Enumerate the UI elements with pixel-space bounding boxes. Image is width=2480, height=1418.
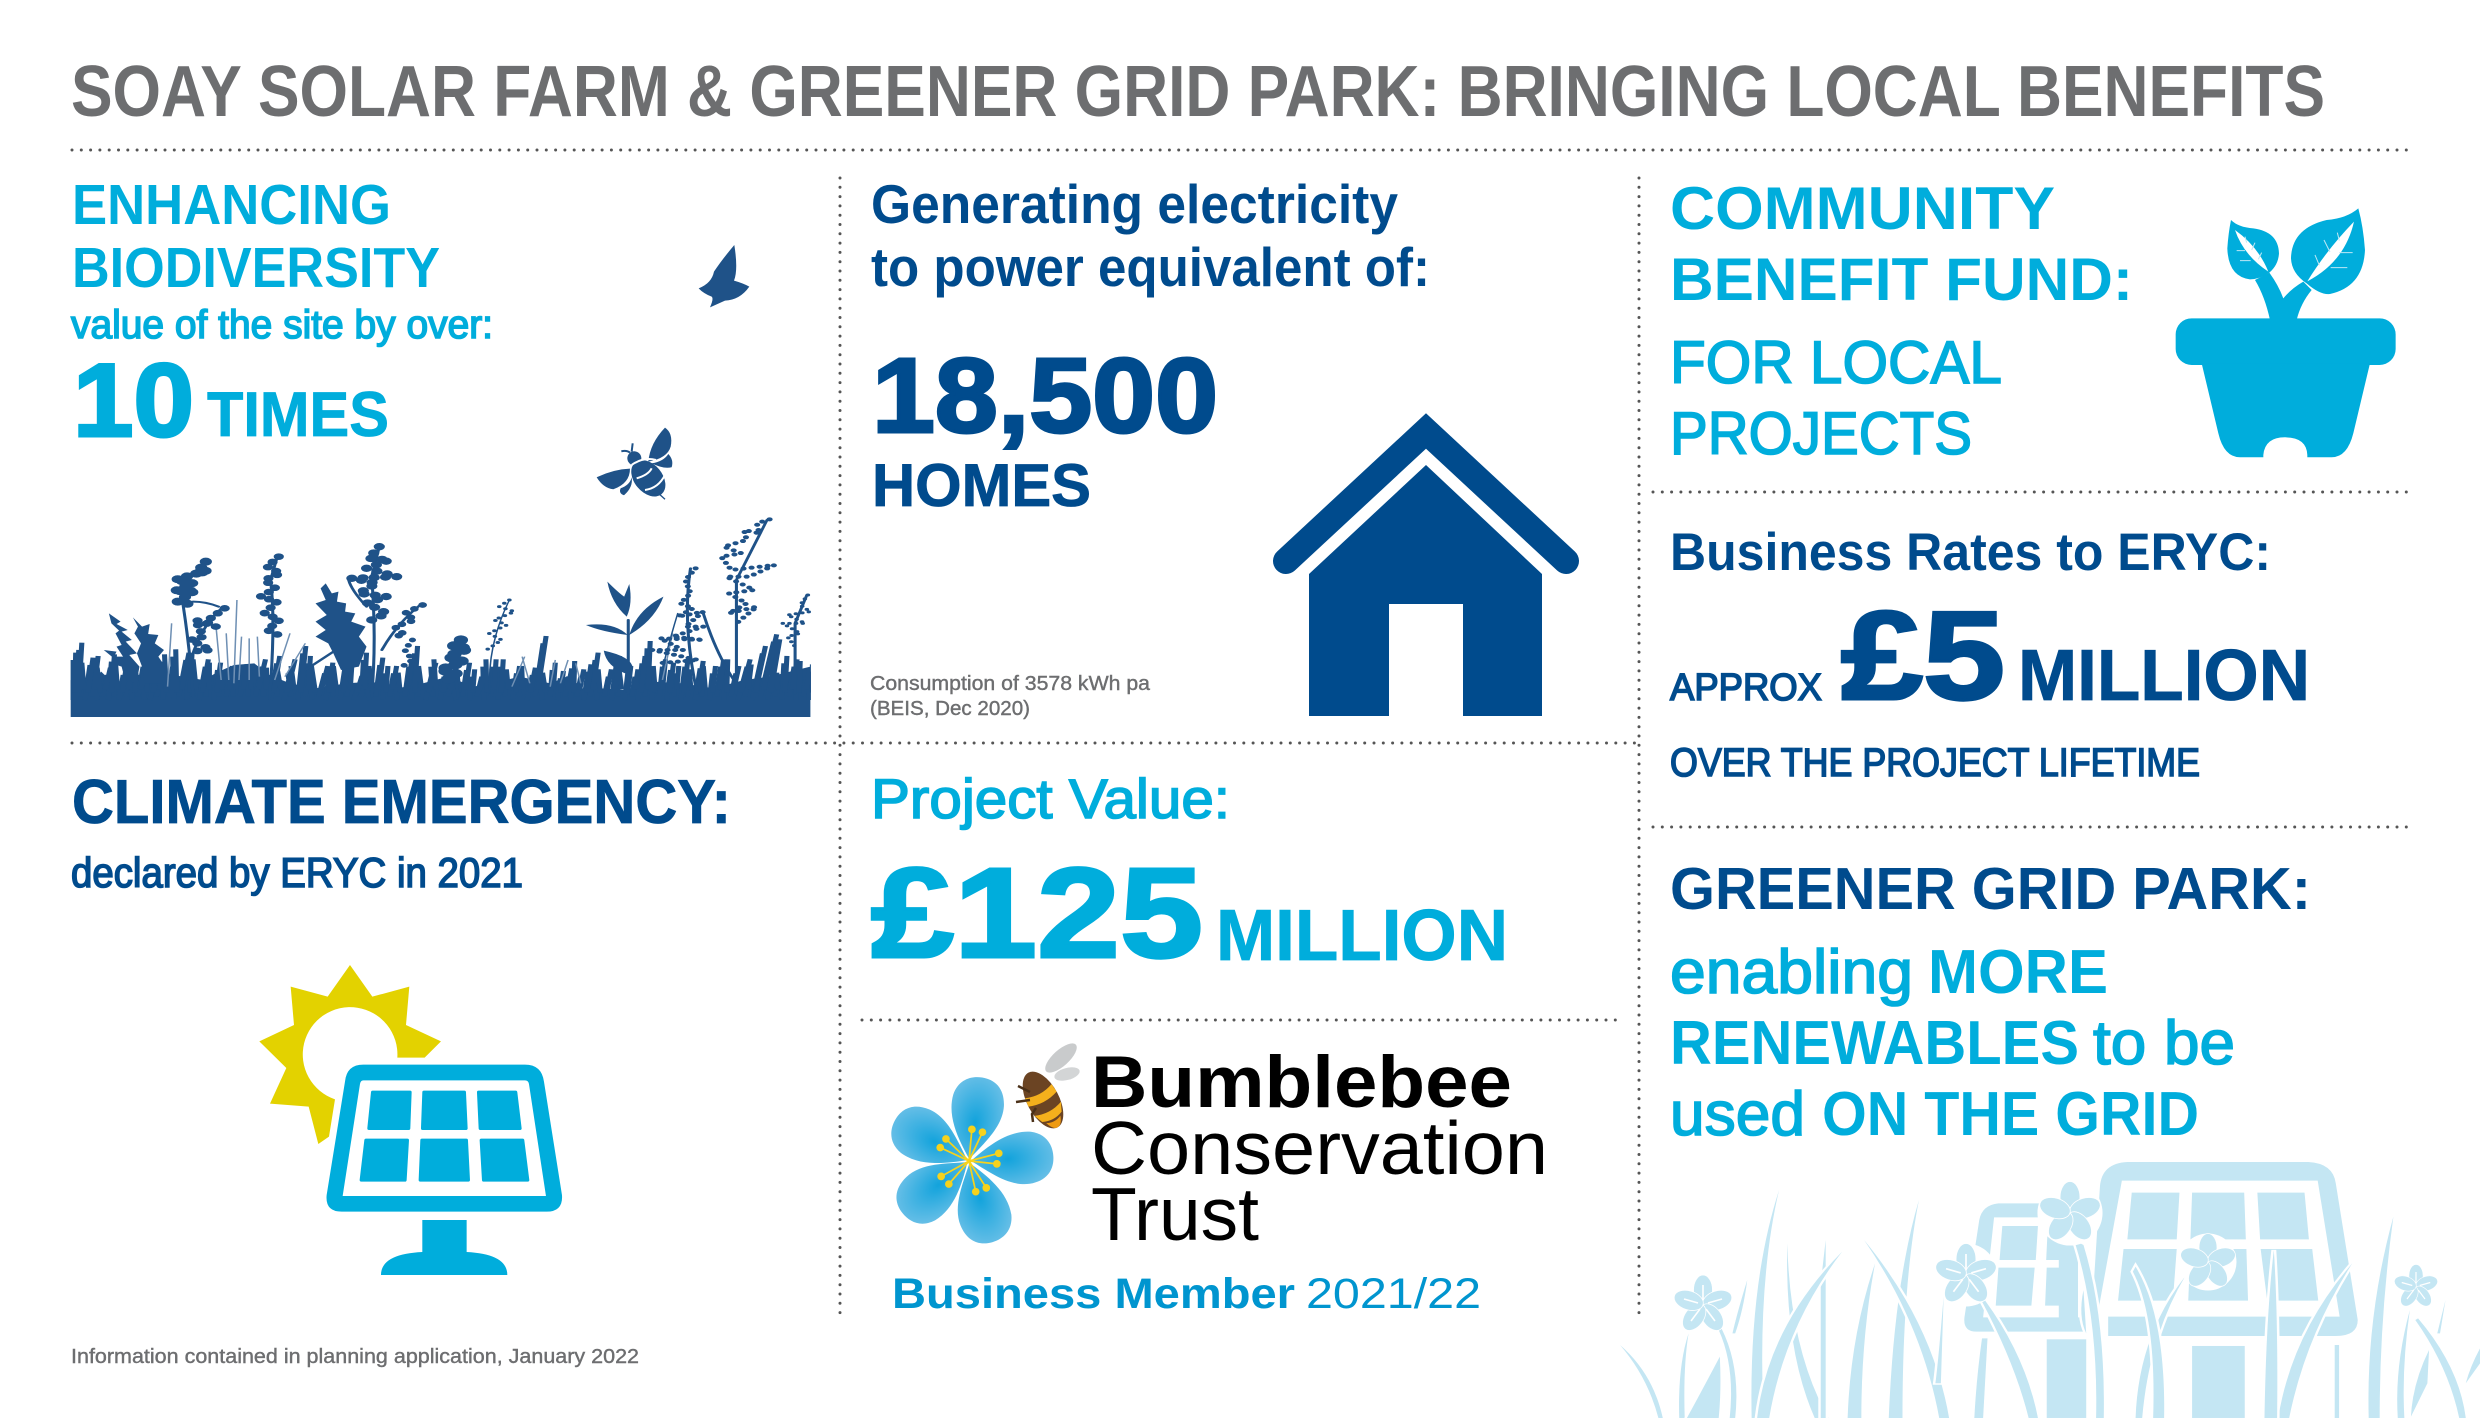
panel: bumblebee conservation trust logo [882,1039,1548,1318]
icon: solar panel [327,1065,562,1275]
heading: enhancing biodiversity: BIODIVERSITY [72,236,440,300]
stat: approx £5 million: MILLION [2018,636,2310,716]
text: enabling more renewables: enabling [1670,938,1913,1007]
heading: enhancing biodiversity [72,173,440,300]
text: declared by ERYC: declared by ERYC in 2021 [71,849,523,896]
stat: 18,500 homes [872,337,1218,519]
panel: business rates [1670,523,2310,785]
text: enabling more renewables: ON THE GRID [1822,1080,2199,1149]
text: business member 2021/22 [892,1270,1481,1318]
decorative dotted dividers [72,150,2409,1313]
icon: plant pot [2176,208,2396,457]
stat: £125 million: £125 [871,842,1203,985]
stat: approx £5 million: £5 [1841,585,2005,726]
heading: business rates to ERYC: Business Rates to ERYC: [1670,523,2271,582]
stat: £125 million [871,842,1508,985]
illustration: wildflower meadow silhouette [71,519,812,717]
icon: sun and solar panel [259,965,562,1275]
footnote: consumption: (BEIS, Dec 2020) [870,698,1030,720]
text: business member 2021/22: 2021/22 [1306,1270,1481,1318]
ferns [109,613,139,680]
stat: £125 million: MILLION [1216,896,1508,976]
panel: greener grid park [1620,856,2480,1418]
icon: bee [597,428,672,503]
heading: community benefit fund: BENEFIT FUND: [1670,246,2133,313]
text: business member 2021/22: Business Member [892,1270,1295,1318]
heading: generating electricity: Generating electricity [871,173,1398,235]
heading: project value: Project Value: [871,767,1230,830]
stat: 18,500 homes: 18,500 [872,337,1218,455]
text: enabling more renewables: MORE [1928,938,2108,1007]
heading: generating electricity [871,173,1430,298]
icon: house [1286,431,1566,716]
logo text: Bumblebee Conservation Trust: Bumblebee [1091,1042,1512,1123]
text: enabling more renewables: RENEWABLES [1670,1009,2079,1078]
stat: 18,500 homes: HOMES [872,452,1091,519]
text: enabling more renewables: to be [2093,1009,2235,1078]
icon: pale flowers [1672,1180,2440,1335]
footnote: consumption: Consumption of 3578 kWh pa [870,673,1151,695]
text: for local projects [1670,329,2002,467]
heading: greener grid park: GREENER GRID PARK: [1670,856,2311,922]
logo text: Bumblebee Conservation Trust: Conservation [1091,1106,1548,1190]
text: for local projects: PROJECTS [1670,400,1972,467]
illustration: pale solar panels, flowers and grass [1620,1162,2480,1418]
text: for local projects: FOR LOCAL [1670,329,2002,396]
heading: community benefit fund: COMMUNITY [1670,175,2055,242]
panel: climate emergency [71,768,731,1275]
footnote: consumption [870,673,1151,720]
icon: sun [259,965,441,1144]
stat: 10 times [73,343,389,459]
heading: generating electricity: to power equivalent of: [871,236,1430,298]
panel: community benefit fund [1670,175,2396,467]
stat: approx £5 million: APPROX [1670,667,1822,709]
text: value of the site: value of the site by over: [71,303,493,347]
icon: bumblebee [1014,1039,1081,1135]
icon: butterfly [699,245,749,307]
text: enabling more renewables: used [1670,1080,1805,1149]
stat: 10 times: TIMES [207,380,389,450]
heading: enhancing biodiversity: ENHANCING [72,173,391,237]
stat: approx £5 million [1670,585,2310,726]
heading: community benefit fund [1670,175,2133,313]
text: over the project lifetime: OVER THE PROJECT LIFETIME [1670,741,2200,785]
stat: 10 times: 10 [73,343,194,459]
text: enabling more renewables [1670,938,2235,1149]
icon: blue flower [882,1073,1055,1249]
footnote: planning application: Information contained in planning application, January 2022 [71,1346,639,1368]
panel: enhancing biodiversity [71,173,812,717]
logo text: Bumblebee Conservation Trust [1091,1042,1548,1256]
heading: climate emergency: CLIMATE EMERGENCY: [72,768,731,837]
panel: project value [871,767,1508,985]
logo text: Bumblebee Conservation Trust: Trust [1091,1172,1259,1256]
leaf plant [607,582,631,617]
panel: generating electricity [870,173,1566,720]
